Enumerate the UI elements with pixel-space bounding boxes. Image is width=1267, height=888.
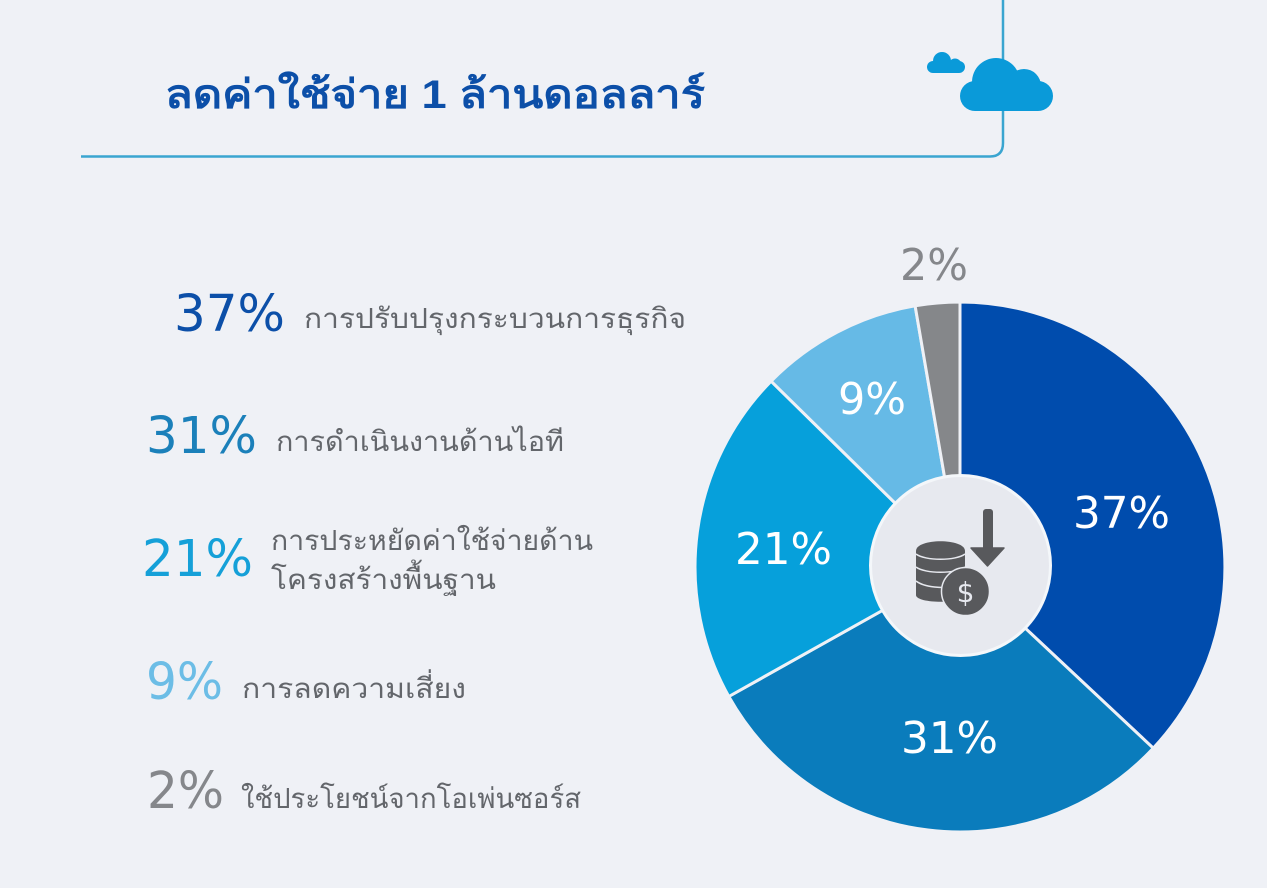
legend: 21%: 21% [142, 530, 253, 589]
legend: 9%: การลดความเสี่ยง [242, 669, 466, 704]
legend: 21%: การประหยัดค่าใช้จ่ายด้าน [271, 524, 593, 556]
label: 9% on pie: 9% [838, 374, 906, 425]
legend: 31%: การดำเนินงานด้านไอที [276, 426, 564, 457]
legend: 9% [146, 653, 466, 712]
legend: 37%: การปรับปรุงกระบวนการธุรกิจ [304, 303, 686, 336]
slice: 37% [960, 302, 1225, 748]
slice: 21% [695, 381, 960, 696]
legend: 2% [147, 762, 581, 821]
legend: 31% [146, 407, 564, 466]
slice: 31% [729, 567, 1153, 832]
header frame line [81, 0, 1003, 156]
pie chart [695, 302, 1225, 832]
legend: 37%: 37% [174, 285, 285, 344]
title: ลดค่าใช้จ่าย 1 ล้านดอลลาร์ [165, 71, 706, 117]
slice: 2% [915, 302, 960, 567]
legend: 9%: 9% [146, 653, 223, 712]
slice: 9% [771, 306, 960, 567]
icon: clouds [927, 52, 1053, 111]
legend: 21% [142, 524, 593, 596]
label: 37% on pie: 37% [1073, 488, 1170, 539]
icon: coins with dollar and down arrow: $ [957, 576, 974, 609]
legend: 2%: ใช้ประโยชน์จากโอเพ่นซอร์ส [241, 782, 581, 814]
legend: 31%: 31% [146, 407, 257, 466]
label: 31% on pie: 31% [901, 713, 998, 764]
center circle [870, 476, 1050, 656]
label: 21% on pie: 21% [735, 524, 832, 575]
label: 2% outside pie: 2% [900, 240, 968, 291]
legend: 21%: โครงสร้างพื้นฐาน [271, 559, 496, 596]
legend: 37% [174, 285, 686, 344]
icon: coins with dollar and down arrow [916, 509, 1004, 616]
legend: 2%: 2% [147, 762, 224, 821]
